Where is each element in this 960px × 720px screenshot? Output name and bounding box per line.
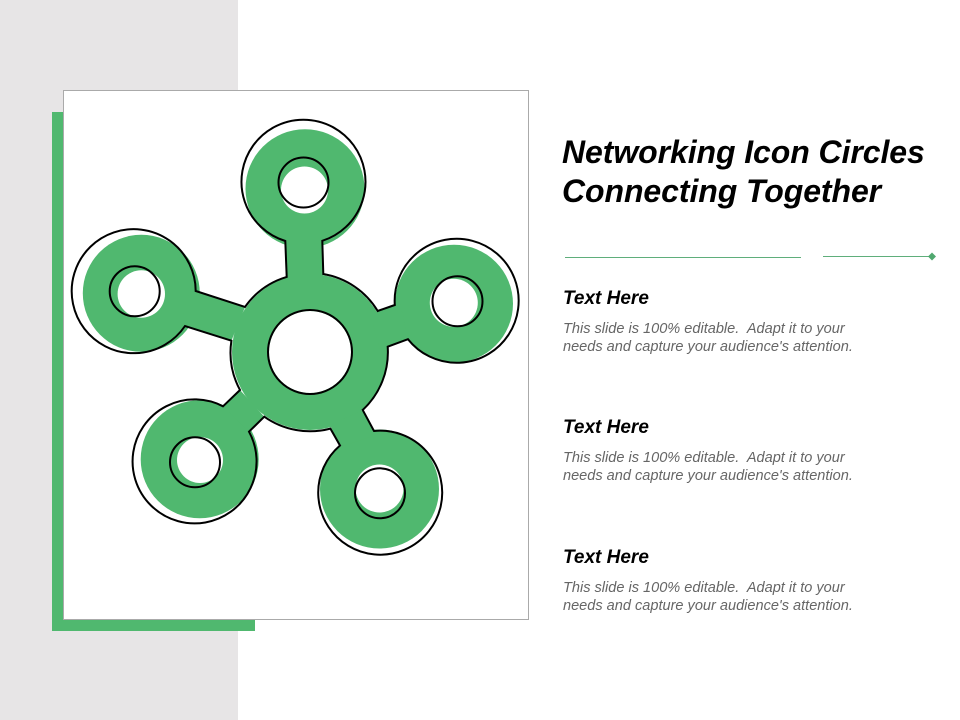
divider right line with diamond — [823, 252, 936, 260]
body 2: needs and capture your audience's attention. — [563, 468, 853, 484]
divider left line — [565, 257, 801, 258]
title: Networking Icon Circles — [562, 134, 925, 170]
body 2: This slide is 100% editable. Adapt it to your — [563, 450, 845, 466]
black icon outline — [72, 120, 519, 555]
green icon fill — [83, 129, 513, 548]
heading 3: Text Here — [563, 547, 649, 568]
title: Connecting Together — [562, 173, 881, 209]
green offset panel — [52, 112, 255, 631]
heading 1: Text Here — [563, 288, 649, 309]
body 1 — [563, 321, 853, 355]
white illustration panel — [63, 90, 529, 620]
grey side band — [0, 0, 238, 720]
body 2 — [563, 450, 853, 484]
body 1: This slide is 100% editable. Adapt it to your — [563, 321, 845, 337]
text block 3 — [563, 547, 853, 614]
text block 2 — [563, 417, 853, 484]
text block 1 — [563, 288, 853, 355]
body 3 — [563, 580, 853, 614]
heading 2: Text Here — [563, 417, 649, 438]
body 1: needs and capture your audience's attention. — [563, 339, 853, 355]
title — [562, 134, 925, 209]
body 3: This slide is 100% editable. Adapt it to your — [563, 580, 845, 596]
body 3: needs and capture your audience's attention. — [563, 598, 853, 614]
